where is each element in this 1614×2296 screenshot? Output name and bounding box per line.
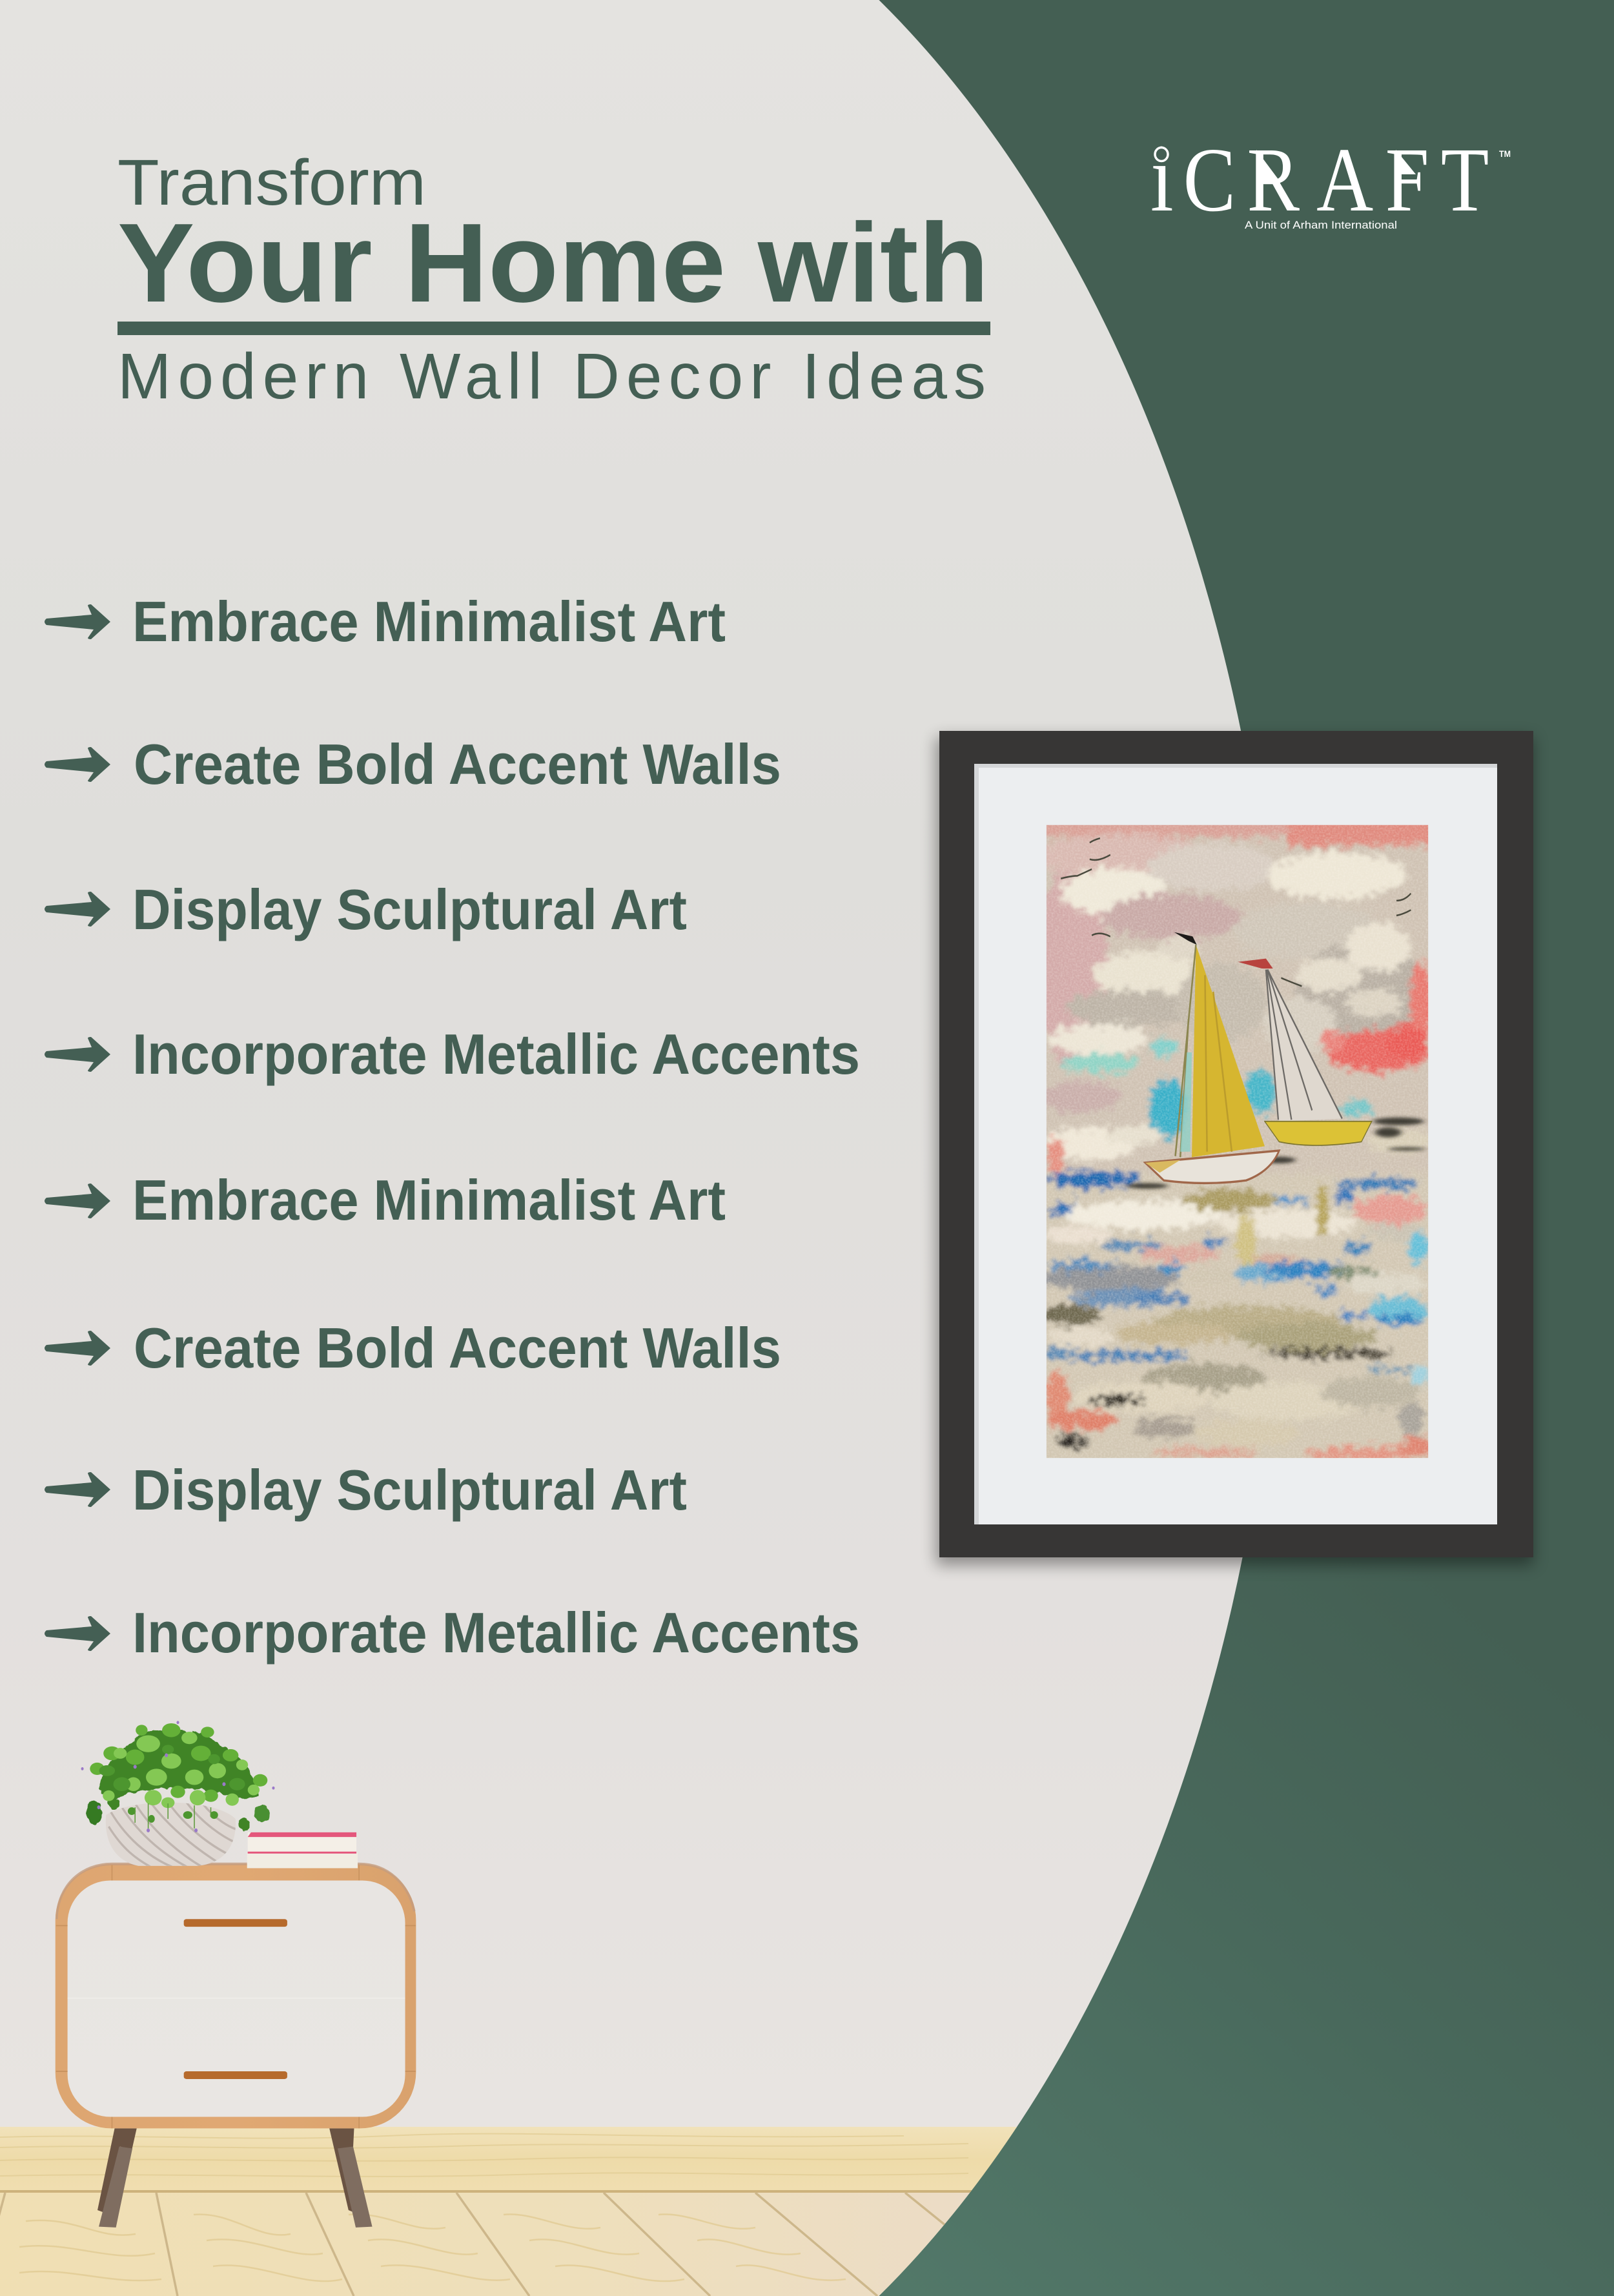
paint grain overlay: [1047, 825, 1428, 1458]
cabinet corner joints: [56, 1865, 416, 2128]
list text: Display Sculptural Art: [132, 877, 687, 941]
front boat white hull: [1145, 1151, 1279, 1183]
front sailboat: [1145, 932, 1279, 1183]
title line: Your Home with: Your Home with: [117, 200, 989, 325]
arrow icon: [45, 1331, 110, 1366]
white mat: [974, 764, 1497, 1524]
list row 7: [45, 1458, 687, 1522]
top drawer handle: [184, 1919, 287, 1927]
list row 5: [45, 1168, 726, 1232]
mat inner shadow: [974, 764, 1497, 1524]
title line: Transform: Transform: [117, 147, 426, 219]
plant: [81, 1721, 275, 1832]
logo trademark: TM: [1499, 149, 1511, 159]
arrow icon: [45, 604, 110, 639]
upper book: [248, 1832, 356, 1853]
wall: [0, 0, 1356, 2128]
birds: [1061, 838, 1411, 986]
header title: [117, 147, 990, 413]
list text: Display Sculptural Art: [132, 1458, 687, 1522]
logo wordmark: iCRAFT: [1150, 125, 1489, 232]
list row 2: [45, 732, 781, 796]
list text: Create Bold Accent Walls: [134, 732, 781, 796]
list text: Incorporate Metallic Accents: [132, 1601, 860, 1665]
back sailboat: [1238, 959, 1372, 1145]
bedside cabinet with plant and books: [56, 1721, 416, 2228]
list row 3: [45, 877, 687, 941]
subtitle: Modern Wall Decor Ideas: Modern Wall Decor Ideas: [117, 340, 986, 413]
front boat dark flag: [1174, 932, 1197, 945]
frame shadow: [936, 737, 1533, 1565]
list row 4: [45, 1022, 860, 1086]
list row 6: [45, 1316, 781, 1380]
arrow icon: [45, 1616, 110, 1651]
black frame: [939, 731, 1533, 1557]
list text: Embrace Minimalist Art: [132, 589, 726, 653]
lower book: [247, 1853, 358, 1868]
back boat yellow hull: [1265, 1122, 1372, 1145]
framed sailboat painting: [936, 731, 1533, 1565]
cabinet drawers panel: [68, 1881, 405, 2117]
logo: iCRAFT: [1150, 125, 1511, 232]
arrow icon: [45, 1472, 110, 1507]
cabinet top edge shading: [57, 1864, 414, 1919]
list text: Embrace Minimalist Art: [132, 1168, 726, 1232]
list text: Incorporate Metallic Accents: [132, 1022, 860, 1086]
cabinet legs: [97, 2128, 373, 2228]
dark boat wake strokes: [1127, 1118, 1425, 1189]
list of decor ideas: [45, 589, 860, 1665]
painting: [1046, 825, 1428, 1458]
ribbed pot: [106, 1799, 240, 1871]
list row 8: [45, 1601, 860, 1665]
logo ring dot: [1155, 147, 1168, 161]
title underline bar: [117, 322, 990, 335]
back boat red flag: [1238, 959, 1273, 969]
bottom drawer handle: [184, 2071, 287, 2079]
arrow icon: [45, 1184, 110, 1218]
books: [247, 1832, 358, 1868]
painted sky and sea texture: [1046, 825, 1428, 1458]
logo wedge in F: [1396, 150, 1416, 174]
logo wedge in R: [1256, 150, 1279, 180]
list row 1: [45, 589, 726, 653]
cabinet wooden body: [56, 1864, 416, 2128]
book pink cover: [248, 1832, 356, 1854]
back boat white sail: [1267, 969, 1342, 1122]
list text: Create Bold Accent Walls: [134, 1316, 781, 1380]
baseboard: [0, 2127, 1098, 2193]
wooden floor planks: [0, 2192, 970, 2296]
arrow icon: [45, 747, 110, 782]
logo tagline: A Unit of Arham International: [1245, 219, 1397, 231]
front boat yellow sail: [1192, 945, 1265, 1157]
arrow icon: [45, 1037, 110, 1072]
arrow icon: [45, 892, 110, 927]
